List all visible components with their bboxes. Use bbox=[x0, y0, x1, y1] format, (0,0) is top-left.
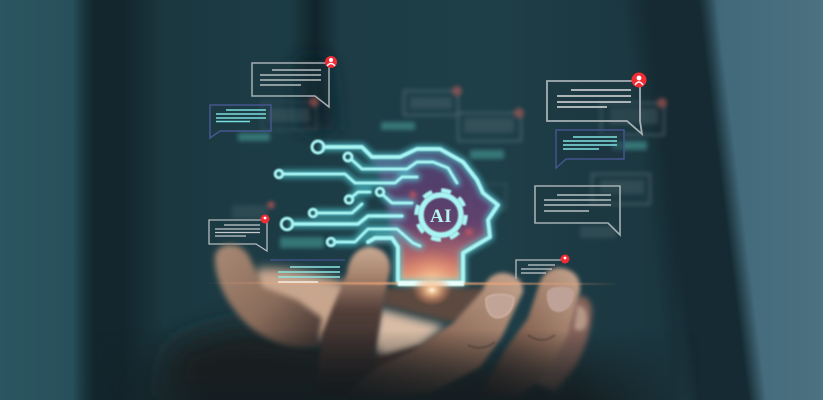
middle finger bbox=[345, 273, 523, 396]
trace and node: large left bbox=[293, 216, 402, 224]
circuit traces: outer glow bbox=[283, 147, 498, 283]
pinky finger bbox=[530, 296, 592, 392]
faint bubble: centre right bbox=[458, 108, 524, 141]
AI label: AI bbox=[430, 206, 452, 227]
faint bubble: far right middle bbox=[592, 174, 650, 204]
message bubble: blue left bbox=[210, 105, 271, 138]
trace and node: short centre bbox=[352, 192, 370, 197]
faint background message bubbles bbox=[232, 86, 667, 238]
message bubble: over the palm bbox=[270, 260, 345, 282]
faint bubble: lower right bbox=[580, 226, 616, 238]
ring finger bbox=[480, 268, 580, 396]
AI gear icon bbox=[416, 190, 466, 240]
circuit nodes bbox=[275, 141, 384, 246]
glowing horizontal light line bbox=[205, 274, 620, 306]
message bubble: left with red badge bbox=[209, 214, 270, 251]
dark lower fade bbox=[140, 333, 670, 400]
hand bbox=[138, 240, 670, 400]
palm lower shadow bbox=[372, 346, 440, 372]
small red glows inside the head bbox=[268, 192, 472, 236]
trace and node: centre right bbox=[383, 195, 412, 203]
faint bubble: left of fingers bbox=[232, 205, 268, 219]
ring fingernail bbox=[547, 287, 574, 312]
AI head glow and fill bbox=[368, 150, 498, 316]
knuckle creases bbox=[468, 335, 555, 348]
dark wrist and sleeve bbox=[160, 325, 560, 396]
inner brain curve bbox=[352, 160, 457, 183]
message bubble: blue right bbox=[556, 130, 624, 168]
faint bubble: top centre bbox=[404, 86, 462, 115]
trace and node: lower bbox=[335, 229, 420, 246]
thumb bbox=[215, 245, 322, 347]
faint bubble: right of head bbox=[470, 184, 506, 210]
faint bubble: far right top bbox=[601, 98, 667, 135]
palm centre bbox=[372, 308, 445, 360]
middle fingernail bbox=[486, 294, 514, 318]
faint teal text bars bbox=[238, 122, 647, 248]
message bubble: behind middle finger with red badge bbox=[516, 254, 570, 279]
palm shadow bbox=[380, 288, 495, 322]
index finger bbox=[314, 247, 390, 396]
trace and node: middle bbox=[317, 204, 362, 213]
palm upper bbox=[245, 268, 352, 340]
message bubble: top left with red badge bbox=[252, 56, 337, 107]
pinky fingernail bbox=[574, 306, 587, 330]
message bubble: top right with red badge bbox=[547, 72, 646, 134]
trace and node: upper left bbox=[283, 174, 417, 183]
head outline bbox=[324, 147, 498, 283]
message bubble: lower right bbox=[535, 186, 620, 235]
faint bubble: upper left bbox=[262, 97, 319, 130]
head outline and circuit traces bbox=[275, 141, 498, 283]
